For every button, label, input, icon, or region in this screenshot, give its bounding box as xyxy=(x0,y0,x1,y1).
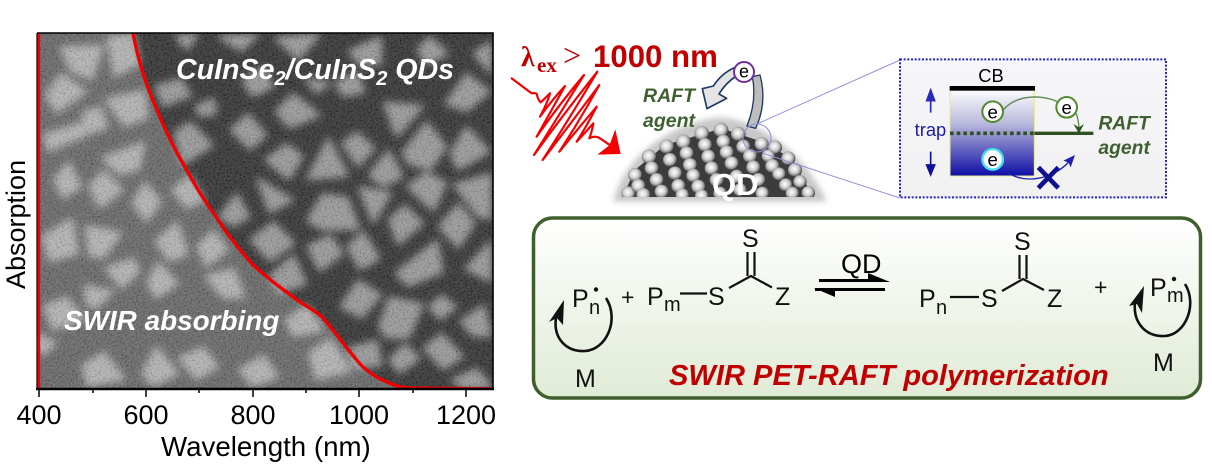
trapped electron: e xyxy=(987,149,998,170)
blocked cross xyxy=(1038,167,1058,188)
excitation wavelength label: λ xyxy=(521,42,535,73)
RAFT agent label in inset: RAFT xyxy=(1098,113,1152,134)
QD label: QD xyxy=(712,167,758,202)
x axis tick labels: 400 xyxy=(16,400,62,430)
Pm-S-C(=S)-Z reactant: Z xyxy=(775,283,790,311)
electron transfer arrows xyxy=(702,67,763,128)
Pm-S-C(=S)-Z reactant xyxy=(647,225,790,316)
right radical Pm with monomer cycle xyxy=(1129,274,1190,377)
excitation wavelength label: ex xyxy=(537,53,557,77)
Pn-S-C(=S)-Z product: P xyxy=(919,285,936,313)
electron transferring: e xyxy=(1061,97,1072,118)
left radical Pn with monomer cycle: P xyxy=(572,285,589,313)
panel: energy level inset xyxy=(900,59,1166,197)
QD surface atoms xyxy=(621,123,815,203)
trap up arrow xyxy=(927,90,935,113)
label: CuInSe2/CuInS2 QDs: 2 xyxy=(375,68,387,90)
Pm-S-C(=S)-Z reactant: S xyxy=(708,283,725,311)
inset frame xyxy=(900,59,1166,197)
QD shadow halo xyxy=(613,117,827,202)
trap state dotted line xyxy=(950,128,1034,139)
icon: electron xyxy=(734,62,754,82)
x axis title: Wavelength (nm) xyxy=(161,431,371,462)
label: CuInSe2/CuInS2 QDs: /CuInS xyxy=(284,54,376,86)
Pn-S-C(=S)-Z product: S xyxy=(981,285,998,313)
y axis title: Absorption xyxy=(1,160,31,289)
transfer curve xyxy=(1003,97,1079,132)
TEM image background with absorption curve xyxy=(37,33,493,389)
QD over equilibrium arrows xyxy=(814,249,890,297)
RAFT agent label in inset xyxy=(1098,113,1152,159)
x axis tick labels xyxy=(16,400,496,430)
electron transferring xyxy=(1056,97,1077,118)
left radical Pn with monomer cycle: n xyxy=(589,297,600,319)
QD over equilibrium arrows: QD xyxy=(841,249,882,279)
panel background xyxy=(534,218,1200,398)
Pn-S-C(=S)-Z product xyxy=(919,228,1062,319)
electron in band: e xyxy=(987,101,998,122)
Pn-S-C(=S)-Z product: Z xyxy=(1047,285,1062,313)
reaction title: SWIR PET-RAFT polymerization xyxy=(669,360,1109,392)
trap label: trap xyxy=(915,119,946,140)
transfer arrowhead xyxy=(1073,124,1084,133)
right radical Pm with monomer cycle: P xyxy=(1150,274,1167,302)
absorption curve xyxy=(39,33,493,389)
trap down arrow xyxy=(927,152,935,175)
RAFT agent level xyxy=(1034,128,1093,138)
label: CuInSe2/CuInS2 QDs: 2 xyxy=(274,68,286,90)
Pn-S-C(=S)-Z product: n xyxy=(936,297,947,319)
RAFT agent label xyxy=(643,85,697,132)
quantum dot nanocrystal xyxy=(613,117,827,203)
gray arrow from QD to electron xyxy=(747,75,763,128)
panel: SWIR PET-RAFT reaction scheme xyxy=(534,218,1200,398)
CB label: CB xyxy=(978,65,1004,86)
Pm-S-C(=S)-Z reactant: m xyxy=(664,294,681,316)
right radical Pm with monomer cycle: m xyxy=(1167,285,1184,307)
plot frame and ticks xyxy=(36,33,494,397)
RAFT agent label in inset: agent xyxy=(1098,138,1151,159)
icon: electron: e xyxy=(739,62,749,82)
x axis tick labels: 1000 xyxy=(329,400,389,430)
right radical Pm with monomer cycle: M xyxy=(1153,349,1174,377)
label: CuInSe2/CuInS2 QDs: QDs xyxy=(387,54,454,86)
x axis tick labels: 800 xyxy=(230,400,276,430)
plus sign right: + xyxy=(1094,274,1107,300)
x axis tick labels: 1200 xyxy=(436,400,496,430)
band gradient xyxy=(950,88,1034,176)
electron in band xyxy=(982,101,1003,122)
Pm-S-C(=S)-Z reactant: P xyxy=(647,283,664,311)
plus sign: + xyxy=(621,284,634,310)
trapped electron xyxy=(982,149,1003,170)
blocked arrowhead xyxy=(1063,155,1075,167)
label: SWIR absorbing: SWIR absorbing xyxy=(64,305,279,336)
Pm-S-C(=S)-Z reactant: S xyxy=(742,225,759,253)
RAFT agent label: RAFT xyxy=(643,85,697,107)
conduction band bar xyxy=(950,86,1035,91)
left radical Pn with monomer cycle xyxy=(549,285,612,393)
panel: absorption chart xyxy=(1,33,496,462)
Pn-S-C(=S)-Z product: S xyxy=(1014,228,1031,256)
excitation wavelength label: 1000 nm xyxy=(593,39,718,74)
left radical Pn with monomer cycle: M xyxy=(575,365,596,393)
label: CuInSe2/CuInS2 QDs: CuInSe xyxy=(176,54,275,86)
x axis tick labels: 600 xyxy=(123,400,169,430)
QD dark core xyxy=(622,128,813,197)
arrow from electron to RAFT agent xyxy=(702,67,738,109)
blocked transfer curve xyxy=(1002,157,1073,179)
RAFT agent label: agent xyxy=(643,110,697,132)
excitation wavelength label: > xyxy=(563,37,581,73)
zoom connector lines xyxy=(743,60,900,198)
excitation wavelength label xyxy=(521,37,718,77)
icon: red light wave arrow xyxy=(512,72,621,160)
